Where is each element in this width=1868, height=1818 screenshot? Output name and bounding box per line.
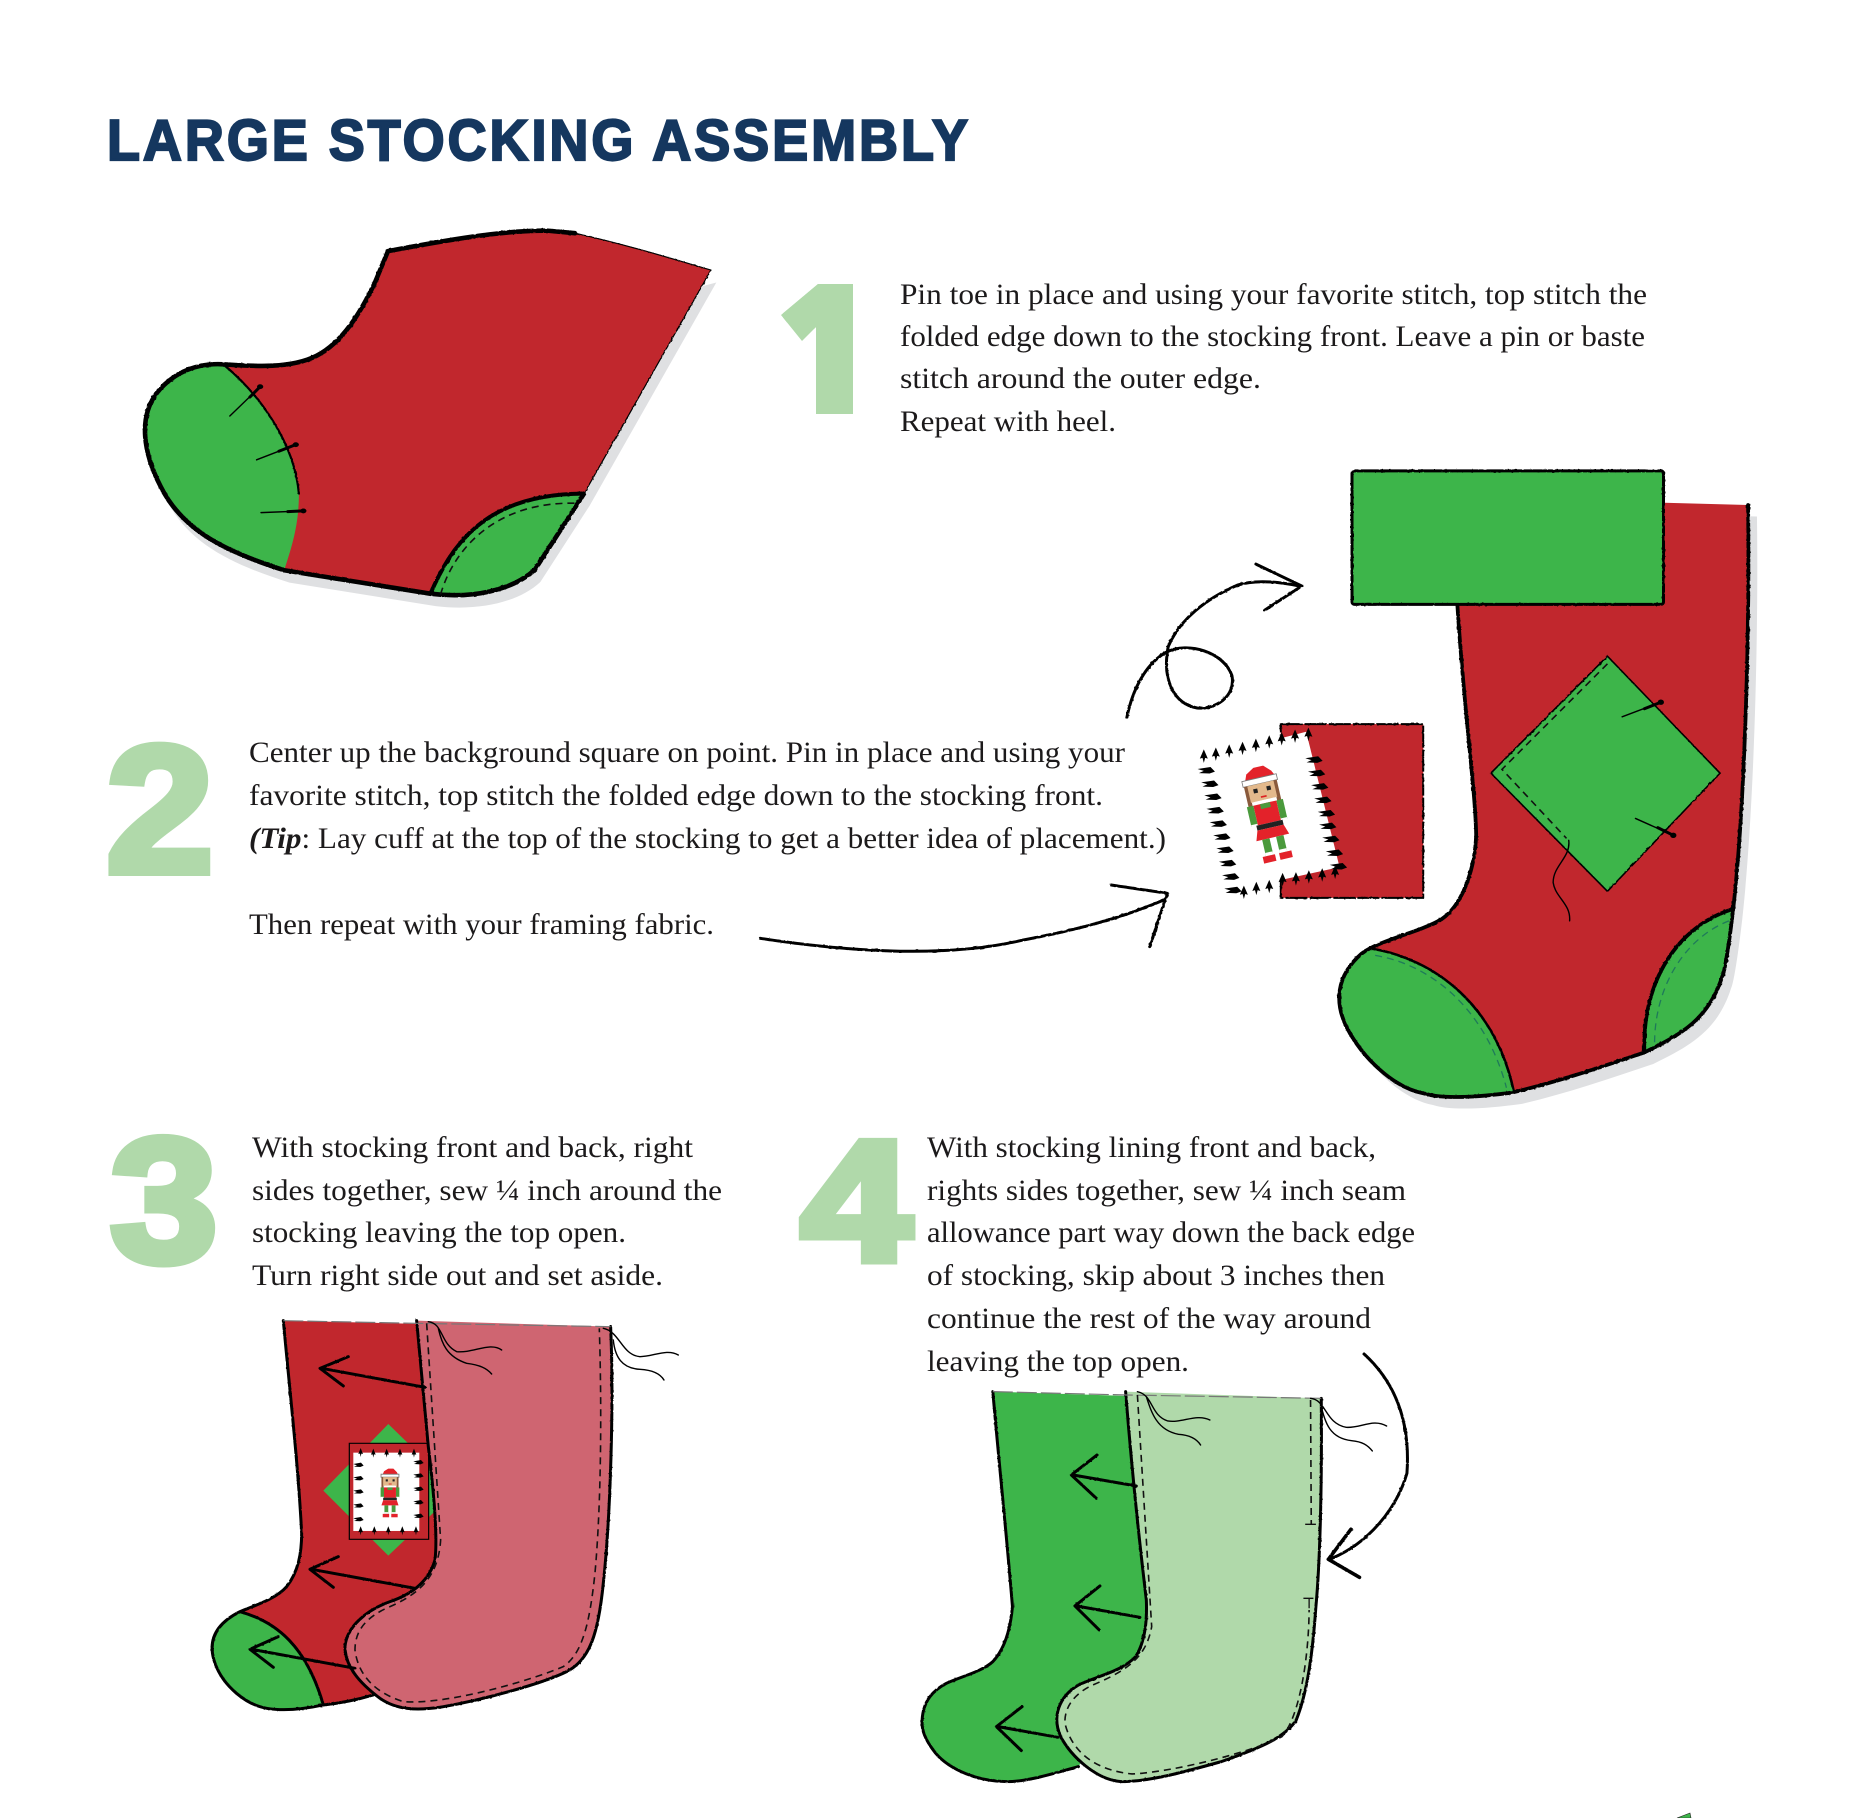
- stocking 1 shadow: [166, 283, 716, 608]
- green toe on front: [212, 1612, 323, 1710]
- loose threads: [1137, 1392, 1387, 1451]
- step 2 instructions: (Tip: Lay cuff at the top of the stocking to get a better idea of placement.): [249, 822, 1166, 855]
- green toe piece on stocking 2: [1644, 909, 1732, 1052]
- step 1 instructions: folded edge down to the stocking front. Leave a pin or baste: [900, 320, 1645, 353]
- stocking 2 outlines: [1339, 505, 1748, 1097]
- stocking 1 red body: [145, 231, 711, 595]
- arrow: swirl pointing to cuff: [1127, 564, 1302, 718]
- green lining outline: [922, 1392, 1078, 1782]
- chalk arrow to the gap: [1328, 1354, 1407, 1577]
- red stocking front: [212, 1321, 443, 1710]
- red framing fabric: [1281, 724, 1423, 898]
- background diamond peeking out: [323, 1424, 457, 1556]
- cuff: [1352, 471, 1664, 604]
- white background square: [1202, 732, 1340, 891]
- step 3 instructions: [252, 1131, 722, 1292]
- step 2 instructions: [249, 736, 1166, 941]
- front outline: [212, 1321, 373, 1710]
- top edge: [283, 1321, 611, 1327]
- top edge: [993, 1392, 1321, 1398]
- loose threads: [428, 1322, 678, 1380]
- seam stitching with skip marks: [1065, 1395, 1316, 1774]
- pink stocking outline: [345, 1321, 612, 1709]
- title: LARGE STOCKING ASSEMBLY: [107, 107, 968, 172]
- framed elf block: [349, 1443, 429, 1539]
- seam stitching on pink stocking: [355, 1323, 601, 1702]
- light lining outline: [1057, 1392, 1321, 1782]
- step 1 instructions: [900, 278, 1647, 438]
- corner decoration: [1677, 1813, 1691, 1818]
- step 4 instructions: [927, 1131, 1415, 1378]
- pins: [230, 384, 306, 513]
- pins on diamond: [1622, 700, 1676, 838]
- illustration: step 1 stocking with pinned heel and toe: [145, 231, 716, 608]
- step 3 instructions: sides together, sew ¼ inch around the: [252, 1174, 722, 1207]
- seam stitching on heel and toe: [1375, 921, 1729, 1088]
- step 1 instructions: Repeat with heel.: [900, 405, 1116, 438]
- step 2 instructions: favorite stitch, top stitch the folded edge down to the stocking front.: [249, 779, 1103, 812]
- step 4 instructions: of stocking, skip about 3 inches then: [927, 1259, 1385, 1292]
- loose thread: [1553, 840, 1570, 921]
- step 1 instructions: stitch around the outer edge.: [900, 362, 1261, 395]
- step 3 instructions: Turn right side out and set aside.: [252, 1259, 663, 1292]
- illustration: step 3 stocking front and back: [212, 1321, 678, 1710]
- step number 3: 3: [110, 1102, 218, 1300]
- stocking 2 red body: [1339, 503, 1748, 1097]
- background diamond: [1491, 656, 1720, 891]
- step 4 instructions: allowance part way down the back edge: [927, 1216, 1415, 1249]
- illustration: step 2 stocking with cuff and diamond: [1339, 471, 1757, 1109]
- step 2 instructions: Then repeat with your framing fabric.: [249, 908, 714, 941]
- step 4 instructions: rights sides together, sew ¼ inch seam: [927, 1174, 1406, 1207]
- step 3 instructions: With stocking front and back, right: [252, 1131, 694, 1164]
- illustration: step 4 lining stockings: [922, 1354, 1407, 1782]
- stocking 1 outlines: [145, 231, 711, 595]
- pink stocking back: [345, 1321, 612, 1709]
- step number 1: 1: [770, 243, 876, 455]
- stocking 1 green toe piece: [430, 494, 584, 595]
- step 2 instructions: Center up the background square on point. Pin in place and using your: [249, 736, 1125, 769]
- step 1 instructions: Pin toe in place and using your favorite stitch, top stitch the: [900, 278, 1647, 311]
- step 4 instructions: With stocking lining front and back,: [927, 1131, 1376, 1164]
- step 4 instructions: continue the rest of the way around: [927, 1302, 1371, 1335]
- step 3 instructions: stocking leaving the top open.: [252, 1216, 626, 1249]
- step number 4: 4: [801, 1106, 911, 1297]
- light green lining back: [1057, 1392, 1321, 1782]
- icon: cross-stitched elf: [1239, 763, 1296, 865]
- toe stitching: [441, 503, 577, 594]
- arrows pointing left: [996, 1455, 1140, 1751]
- step number 2: 2: [106, 708, 214, 911]
- arrows pointing left: [250, 1357, 425, 1668]
- step 4 instructions: leaving the top open.: [927, 1345, 1189, 1378]
- illustration: framed elf block: [1198, 724, 1423, 899]
- stocking 2 shadow: [1355, 514, 1757, 1109]
- stocking 1 green heel piece: [145, 364, 299, 570]
- arrow: long curved arrow to block: [760, 885, 1167, 951]
- green lining front: [922, 1392, 1150, 1782]
- raw edge stitches: [1198, 728, 1347, 899]
- green heel piece on stocking 2: [1339, 949, 1514, 1097]
